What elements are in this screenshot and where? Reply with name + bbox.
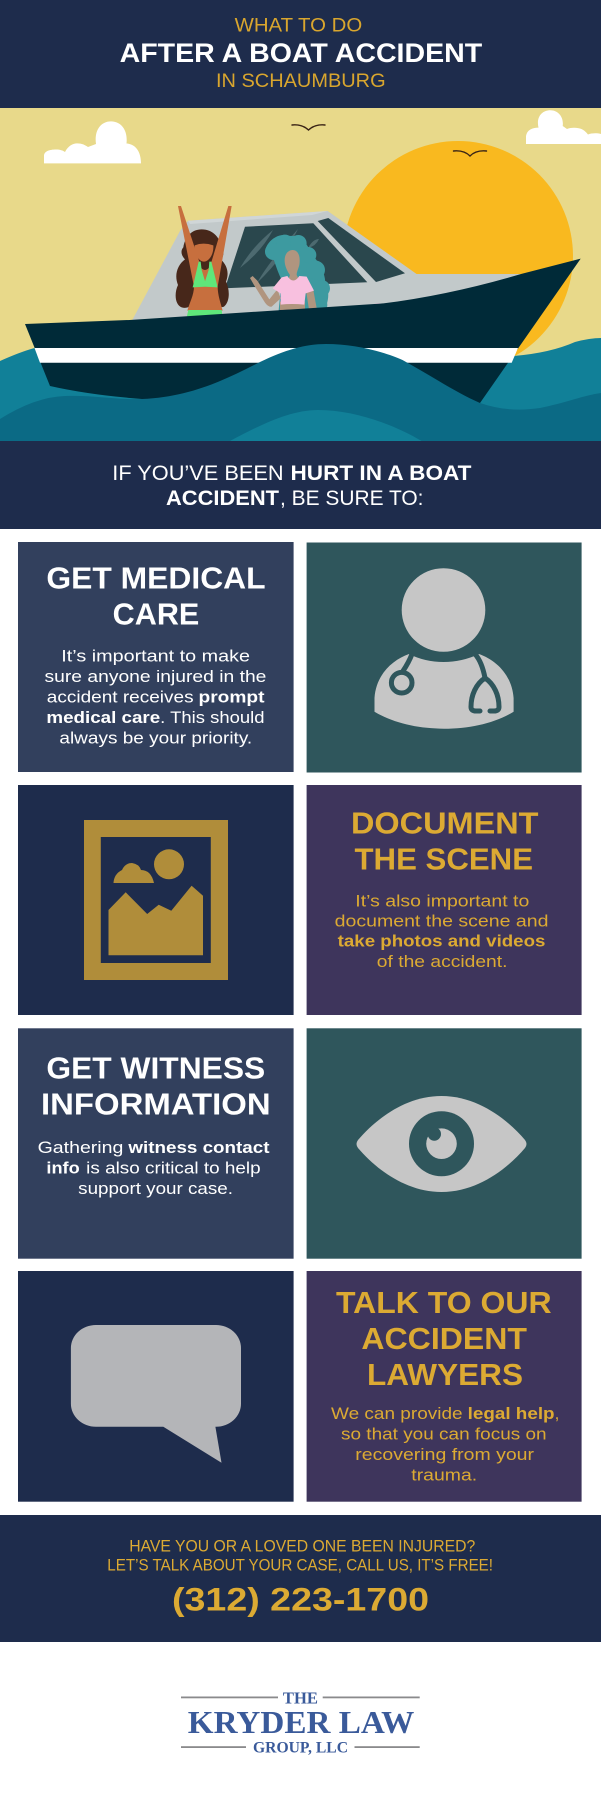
phone number: (312) 223-1700 [172, 1582, 429, 1618]
woman waving [250, 235, 384, 315]
panel: picture icon [18, 785, 294, 1015]
bikini bottom [187, 310, 223, 317]
woman with raised arms [176, 206, 232, 317]
sun [343, 141, 573, 371]
cloud right [526, 110, 601, 144]
heading: GET MEDICAL [46, 562, 266, 596]
logo: the kryder law group: THE [283, 1688, 318, 1707]
body text: support your case. [78, 1179, 233, 1198]
call to action text: HAVE YOU OR A LOVED ONE BEEN INJURED? [129, 1537, 475, 1556]
body text: witness contact [127, 1138, 270, 1157]
panel: get witness information [18, 1028, 294, 1259]
body text [331, 1404, 559, 1484]
body text: . This should [160, 708, 264, 727]
body text: take photos and videos [338, 931, 545, 950]
body text: of the accident. [377, 952, 508, 971]
heading [41, 1052, 271, 1122]
body text: medical care [46, 708, 160, 727]
boat cabin [130, 211, 525, 325]
birds [292, 125, 486, 156]
cloud left [44, 121, 141, 163]
panel: talk to our accident lawyers [307, 1271, 582, 1502]
body text: prompt [198, 687, 265, 706]
main title: AFTER A BOAT ACCIDENT [120, 38, 482, 68]
call to action text [107, 1537, 493, 1574]
shorts [279, 309, 305, 314]
logo: the kryder law group: KRYDER LAW [188, 1704, 414, 1740]
heading: GET WITNESS [46, 1052, 265, 1086]
body text: sure anyone injured in the [44, 667, 266, 686]
heading [351, 807, 539, 877]
heading: THE SCENE [354, 843, 533, 877]
heading [46, 562, 266, 632]
call to action text: LET’S TALK ABOUT YOUR CASE, CALL US, IT’S FREE! [107, 1555, 493, 1574]
panel: doctor icon [307, 542, 582, 772]
panel: get medical care [18, 542, 294, 772]
window reflections [240, 229, 319, 283]
body text: so that you can focus on [341, 1424, 547, 1443]
heading: LAWYERS [367, 1358, 523, 1392]
subheading band: ACCIDENT [166, 487, 279, 510]
icon: doctor [374, 568, 514, 729]
body text: We can provide [331, 1404, 463, 1423]
windshield [225, 218, 405, 288]
header banner [0, 0, 601, 108]
hair [176, 229, 229, 308]
heading: CARE [113, 598, 199, 632]
body text: document the scene and [335, 911, 548, 930]
body text: recovering from your [355, 1445, 534, 1464]
heading: INFORMATION [41, 1088, 271, 1122]
icon: speech bubble [71, 1325, 241, 1463]
panel: document the scene [307, 785, 582, 1015]
heading [336, 1286, 552, 1392]
arms and torso [178, 206, 232, 311]
neck and face [285, 250, 300, 282]
body text: always be your priority. [59, 728, 252, 747]
face [195, 244, 213, 262]
body text [335, 891, 548, 971]
body text: is also critical to help [86, 1158, 261, 1177]
subheading band [0, 441, 601, 529]
subheading band: HURT IN A BOAT [290, 462, 472, 485]
body text: info [46, 1158, 80, 1177]
body text: Gathering [38, 1138, 123, 1157]
pink shirt [273, 276, 314, 305]
midriff [280, 302, 305, 312]
title line 3: IN SCHAUMBURG [216, 71, 386, 92]
bikini top [193, 262, 218, 287]
hero illustration: boat at sunset [0, 108, 601, 441]
body text [44, 646, 266, 747]
front wave [0, 344, 601, 441]
white hull stripe [34, 348, 518, 363]
panel: eye icon [307, 1028, 582, 1259]
heading: DOCUMENT [351, 807, 539, 841]
logo: the kryder law group [181, 1688, 420, 1757]
teal hair [265, 235, 330, 315]
subheading band: IF YOU’VE BEEN [112, 462, 284, 485]
body text: It’s also important to [355, 891, 529, 910]
body text: , [555, 1404, 559, 1423]
back wave [0, 338, 601, 441]
heading: TALK TO OUR [336, 1286, 552, 1320]
body text: It’s important to make [61, 646, 250, 665]
body text [38, 1138, 270, 1198]
bottom light wave [230, 410, 422, 441]
call to action footer [0, 1515, 601, 1642]
arm [250, 276, 281, 307]
heading: ACCIDENT [361, 1322, 527, 1356]
boat hull [25, 259, 581, 425]
body text: trauma. [411, 1465, 477, 1484]
body text: legal help [468, 1404, 555, 1423]
icon: framed picture [84, 820, 228, 980]
title line 1: WHAT TO DO [235, 16, 362, 37]
panel: speech bubble icon [18, 1271, 294, 1502]
icon: eye [356, 1096, 526, 1192]
body text: accident receives [47, 687, 194, 706]
logo: the kryder law group: GROUP, LLC [253, 1740, 348, 1757]
subheading band: , BE SURE TO: [280, 487, 424, 510]
